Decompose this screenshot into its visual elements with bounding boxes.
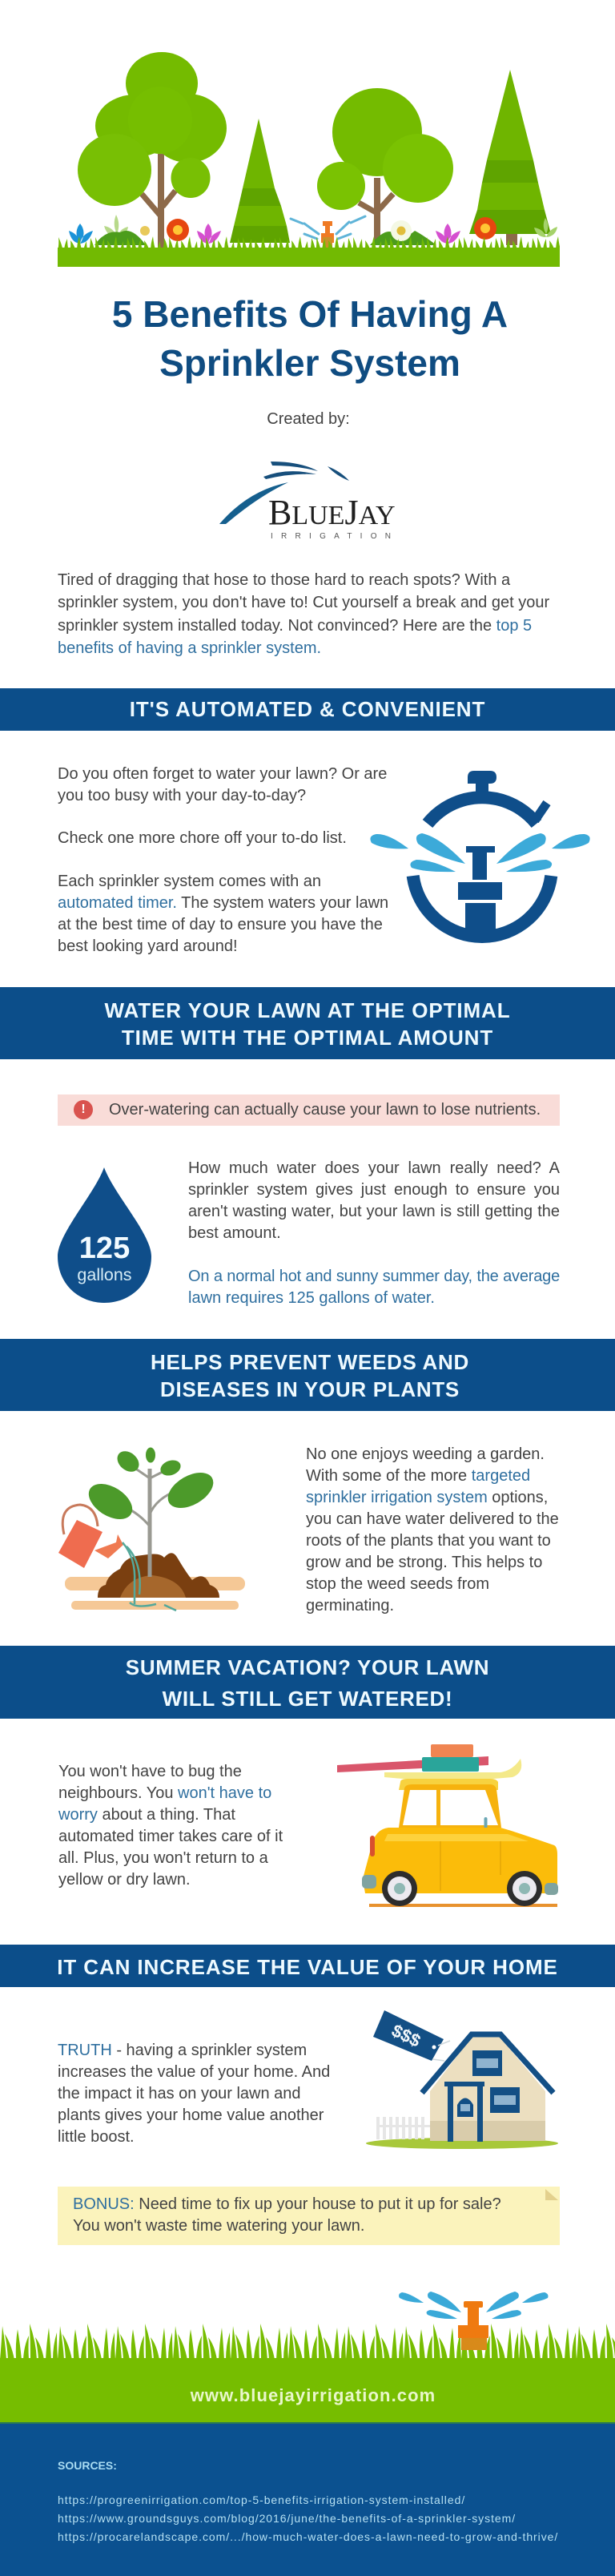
text block: No one enjoys weeding a garden. <box>306 1445 545 1463</box>
text block: You won't have to bug the <box>58 1763 242 1780</box>
heading: SUMMER VACATION? YOUR LAWN <box>126 1655 489 1679</box>
sources heading: SOURCES: <box>58 2459 117 2472</box>
panel: optimal time and amount <box>0 987 615 1306</box>
heading: IT CAN INCREASE THE VALUE OF YOUR HOME <box>57 1955 558 1979</box>
text block: best looking yard around! <box>58 937 238 955</box>
bonus text <box>73 2195 501 2235</box>
heading: HELPS PREVENT WEEDS AND <box>151 1350 469 1374</box>
title: Sprinkler System <box>159 341 460 383</box>
text block: How much water does your lawn really need? A <box>188 1159 560 1176</box>
text block: at the best time of day to ensure you have the <box>58 915 383 933</box>
icon: water drop 125 gallons: 125 <box>79 1232 130 1265</box>
icon: large round tree <box>78 52 227 248</box>
text block: all. Plus, you won't return to a <box>58 1849 268 1867</box>
text block: germinating. <box>306 1596 394 1614</box>
illustration: watering can and plant <box>58 1447 245 1612</box>
heading <box>0 1945 615 1987</box>
text block: aren't wasting water, but your lawn is still getting the <box>188 1202 560 1219</box>
panel: summer vacation <box>0 1646 615 1907</box>
callout: bonus <box>58 2187 560 2245</box>
heading: TIME WITH THE OPTIMAL AMOUNT <box>122 1026 493 1050</box>
text block: grow and be strong. This helps to <box>306 1553 542 1570</box>
text: introduction: Tired of dragging that hose to those hard to reach spots? With a <box>58 571 510 589</box>
icon: medium round tree <box>317 88 453 244</box>
heading: WILL STILL GET WATERED! <box>163 1686 452 1710</box>
source links: https://www.groundsguys.com/blog/2016/june/the-benefits-of-a-sprinkler-system/ <box>58 2512 516 2525</box>
heading: IT'S AUTOMATED & CONVENIENT <box>130 697 485 721</box>
text block: plants gives your home value another <box>58 2106 324 2123</box>
text block: little boost. <box>58 2128 135 2146</box>
icon: tall cone tree <box>469 70 551 245</box>
text: introduction: sprinkler system installed today. Not convinced? Here are the top 5 <box>58 617 532 635</box>
source links <box>58 2493 558 2543</box>
text block: increases the value of your home. And <box>58 2062 330 2080</box>
title: 5 Benefits Of Having A <box>112 293 508 335</box>
text: introduction <box>58 571 549 657</box>
text block: best amount. <box>188 1224 281 1242</box>
heading: DISEASES IN YOUR PLANTS <box>160 1377 460 1401</box>
logo: BlueJay Irrigation: IRRIGATION <box>271 532 391 541</box>
title <box>112 293 508 383</box>
heading <box>0 1646 615 1719</box>
panel: home value <box>0 1945 615 2245</box>
text block: worry about a thing. That <box>58 1806 235 1824</box>
heading <box>0 987 615 1059</box>
text block <box>306 1445 559 1614</box>
text block: stop the weed seeds from <box>306 1575 489 1593</box>
text block: neighbours. You won't have to <box>58 1784 271 1801</box>
text block: sprinkler irrigation system options, <box>306 1489 548 1506</box>
text block <box>58 764 388 955</box>
illustration: car with luggage <box>337 1744 558 1907</box>
heading: WATER YOUR LAWN AT THE OPTIMAL <box>104 998 511 1022</box>
logo: BlueJay Irrigation: BLUEJAY <box>268 493 396 532</box>
source links: https://procarelandscape.com/.../how-much-water-does-a-lawn-need-to-grow-and-thrive/ <box>58 2530 558 2543</box>
panel: footer lawn <box>0 2292 615 2424</box>
text block: lawn requires 125 gallons of water. <box>188 1288 435 1306</box>
icon: stopwatch sprinkler <box>370 771 590 943</box>
text block: With some of the more targeted <box>306 1466 530 1484</box>
icon: alert <box>74 1100 93 1119</box>
icon: flowers and plants <box>69 215 557 245</box>
text block <box>58 2042 330 2146</box>
illustration: house with price tag: $$$ <box>388 2020 424 2051</box>
panel: automated and convenient <box>0 688 615 955</box>
text: introduction: benefits of having a sprinkler system. <box>58 639 321 657</box>
heading <box>0 1339 615 1411</box>
fold corner <box>545 2189 558 2200</box>
heading <box>0 688 615 731</box>
panel: hero garden illustration <box>58 52 560 267</box>
panel: sources <box>0 2424 615 2576</box>
panel: weeds and diseases <box>0 1339 615 1614</box>
text block: Do you often forget to water your lawn? Or are <box>58 764 387 782</box>
source links: https://progreenirrigation.com/top-5-benefits-irrigation-system-installed/ <box>58 2493 465 2506</box>
text block: automated timer takes care of it <box>58 1827 283 1844</box>
text block: the impact it has on your lawn and <box>58 2085 301 2102</box>
illustration: house with price tag <box>366 2010 558 2149</box>
icon: orange sprinkler <box>399 2292 548 2350</box>
bonus text: You won't waste time watering your lawn. <box>73 2217 364 2235</box>
text block: On a normal hot and sunny summer day, the average <box>188 1268 560 1285</box>
text: introduction: sprinkler system, you don't have to! Cut yourself a break and get your <box>58 594 549 611</box>
text block: you can have water delivered to the <box>306 1510 559 1527</box>
text: created by: Created by: <box>267 410 350 428</box>
website url: www.bluejayirrigation.com <box>191 2385 436 2405</box>
grass strip <box>58 236 560 267</box>
text block: sprinkler system gives just enough to ensure you <box>188 1181 560 1199</box>
icon: small sprinkler <box>291 216 365 252</box>
text block: you too busy with your day-to-day? Check one more chore off your to-do list. Each sprinkler system comes with an <box>58 787 347 889</box>
logo: BlueJay Irrigation <box>219 462 396 541</box>
text block: roots of the plants that you want to <box>306 1532 551 1550</box>
text block: TRUTH - having a sprinkler system <box>58 2042 307 2059</box>
text block: automated timer. The system waters your lawn <box>58 894 388 912</box>
icon: small cone tree <box>230 119 290 243</box>
text block <box>58 1763 283 1888</box>
grass <box>0 2321 615 2424</box>
icon: water drop 125 gallons: gallons <box>77 1265 132 1284</box>
warning text: Over-watering can actually cause your lawn to lose nutrients. <box>109 1101 541 1119</box>
text block <box>188 1159 560 1306</box>
icon: water drop 125 gallons <box>58 1167 151 1303</box>
bonus text: BONUS: Need time to fix up your house to put it up for sale? <box>73 2195 501 2213</box>
text block: yellow or dry lawn. <box>58 1870 191 1888</box>
icon: alert: ! <box>81 1103 86 1116</box>
callout: over-watering warning <box>58 1094 560 1126</box>
